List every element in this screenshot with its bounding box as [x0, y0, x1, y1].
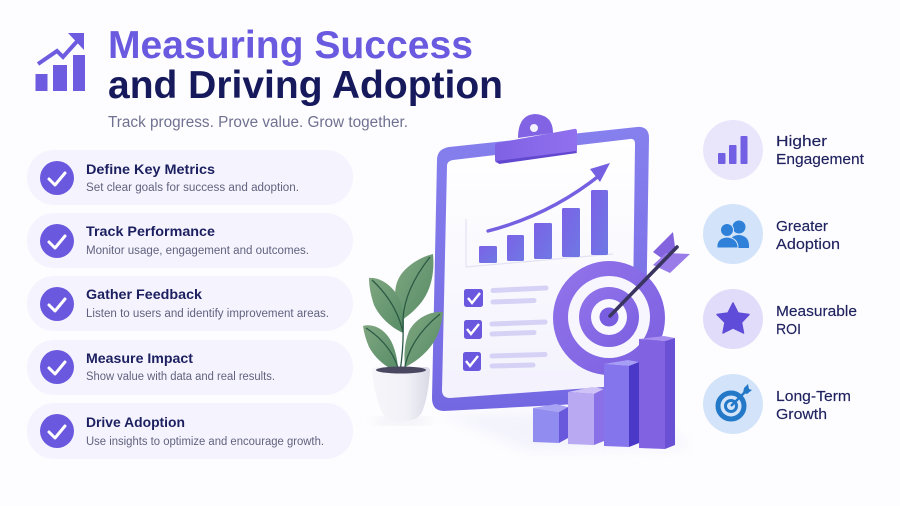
card: Define Key Metrics: Set clear goals for success and adoption. [86, 182, 299, 194]
benefit: Measurable ROI [703, 289, 857, 349]
logo icon: rising bars and arrow [36, 33, 85, 91]
title: Measuring Success [108, 24, 473, 67]
card: Measure Impact: Show value with data and real results. [86, 371, 275, 383]
card: Define Key Metrics [27, 150, 353, 205]
card: Drive Adoption [27, 403, 353, 459]
benefit: Long-Term Growth [703, 374, 851, 434]
benefit: Greater Adoption [703, 204, 840, 264]
illustration: clipboard [432, 114, 690, 452]
benefit: Greater Adoption: Greater [776, 218, 828, 235]
benefit: Greater Adoption: Adoption [776, 236, 840, 253]
card: Track Performance: Track Performance [86, 223, 215, 239]
benefit: Measurable ROI: Measurable [776, 303, 857, 320]
clipboard paper [442, 139, 635, 398]
benefit: Higher Engagement: Higher [776, 133, 827, 150]
title [108, 24, 503, 107]
plant leaves [363, 254, 443, 372]
3D bar 4 [639, 336, 675, 449]
card: Measure Impact [27, 340, 353, 395]
card: Gather Feedback: Gather Feedback [86, 286, 202, 302]
arrow in target [610, 232, 690, 316]
clipboard frame [432, 127, 649, 411]
bar chart on clipboard [466, 163, 613, 267]
card: Drive Adoption: Use insights to optimize and encourage growth. [86, 436, 324, 448]
card: Gather Feedback: Listen to users and identify improvement areas. [86, 308, 329, 320]
3D bar 3 [604, 360, 639, 447]
target [553, 261, 665, 375]
card: Define Key Metrics: Define Key Metrics [86, 161, 215, 177]
3D bar 1 [533, 404, 568, 443]
benefit: Higher Engagement: Engagement [776, 151, 865, 168]
card: Measure Impact: Measure Impact [86, 350, 193, 366]
benefit: Long-Term Growth: Growth [776, 406, 827, 423]
panel: benefits [703, 120, 865, 434]
card: Gather Feedback [27, 276, 353, 331]
card: Track Performance [27, 213, 353, 268]
plant pot [372, 366, 430, 421]
title: and Driving Adoption [108, 64, 503, 107]
checklist [463, 288, 546, 371]
subtitle: Track progress. Prove value. Grow together. [108, 114, 408, 131]
clipboard clip [495, 114, 577, 164]
benefit: Long-Term Growth: Long-Term [776, 388, 851, 405]
benefit: Higher Engagement [703, 120, 865, 180]
3D bar 2 [568, 387, 604, 445]
card: Drive Adoption: Drive Adoption [86, 414, 185, 430]
panel: step list [27, 150, 353, 459]
illustration: potted plant [363, 254, 443, 424]
card: Track Performance: Monitor usage, engagement and outcomes. [86, 245, 309, 257]
benefit: Measurable ROI: ROI [776, 321, 801, 338]
